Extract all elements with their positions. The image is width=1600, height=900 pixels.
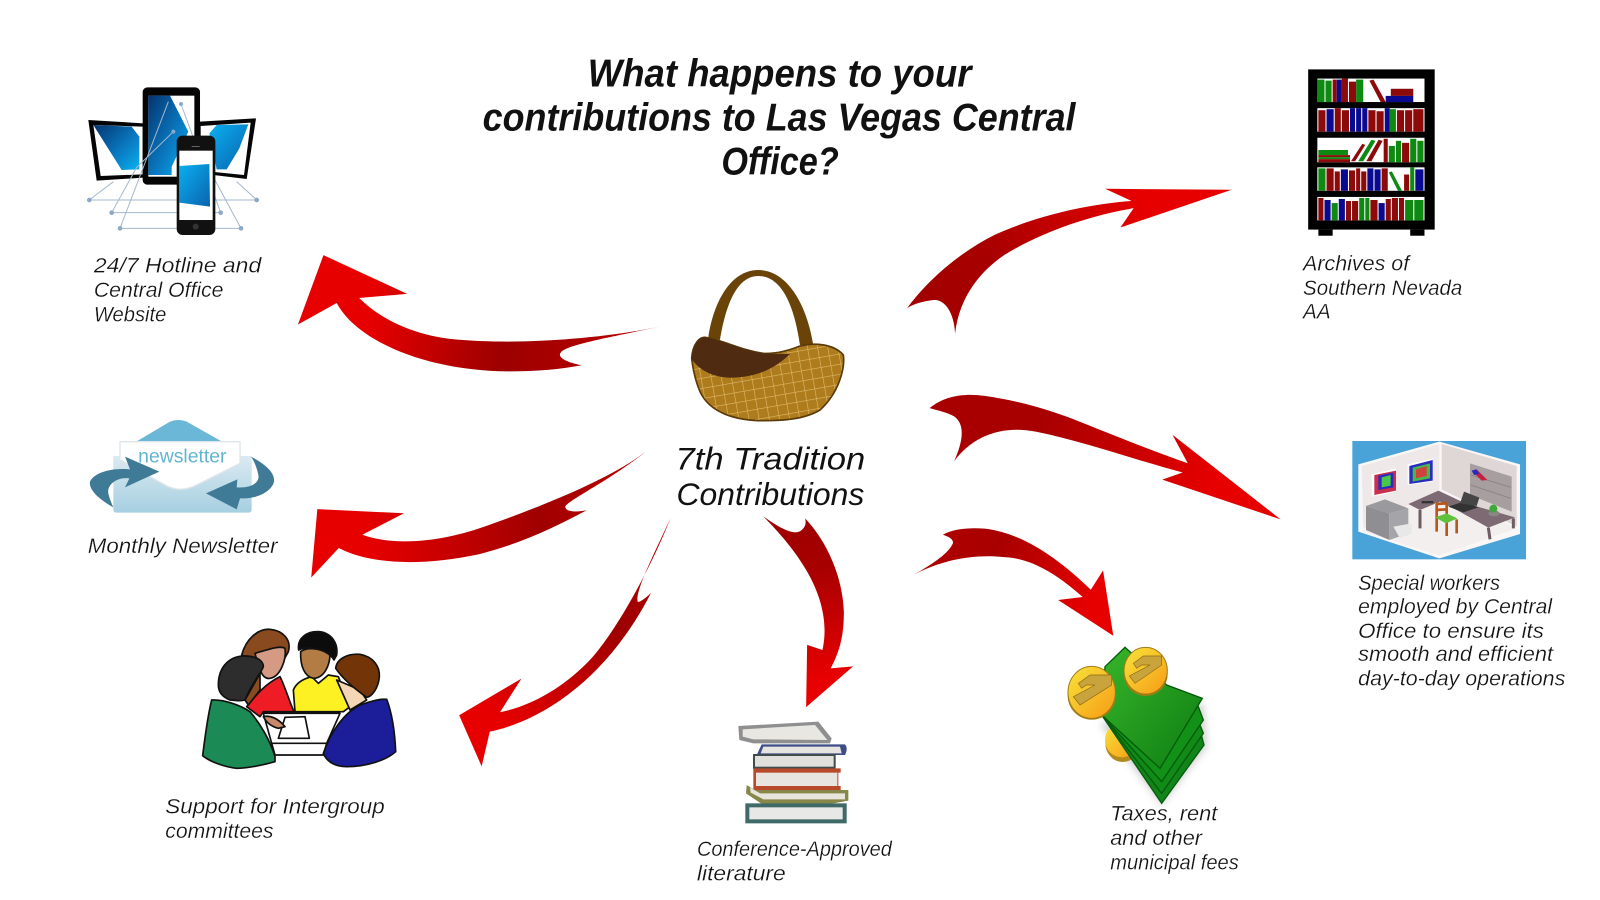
icon: stack of books — [738, 722, 848, 823]
circular arrow right — [206, 457, 274, 509]
icon: office room — [1352, 441, 1526, 559]
label: hotline: Website — [94, 302, 166, 326]
label: taxes: municipal fees — [1110, 850, 1239, 874]
title: contributions to Las Vegas Central — [483, 97, 1077, 140]
shelf 5 books — [1318, 198, 1423, 220]
arrow: to hotline — [298, 255, 660, 371]
man in yellow — [293, 632, 350, 712]
label: special workers: Office to ensure its — [1358, 619, 1544, 643]
hand — [263, 716, 285, 728]
label: literature: Conference-Approved — [697, 837, 893, 861]
plant — [1488, 505, 1500, 516]
label: taxes: Taxes, rent — [1110, 801, 1218, 825]
icon: newsletter envelope — [90, 420, 274, 513]
person in blue — [323, 654, 396, 767]
title — [483, 53, 1077, 183]
arrow: to special workers — [930, 395, 1281, 519]
shelf 2 books — [1318, 108, 1423, 132]
painting right — [1408, 458, 1433, 485]
icon: money and coins — [1068, 647, 1207, 805]
label: committees: committees — [165, 819, 274, 843]
front phone — [177, 136, 215, 235]
filing cabinet — [1366, 499, 1412, 540]
desk — [1408, 491, 1515, 539]
arrow: to newsletter — [311, 449, 649, 578]
table — [263, 713, 340, 755]
icon: bookshelf — [1308, 69, 1435, 236]
label: hotline: 24/7 Hotline and — [93, 253, 262, 277]
label: special workers: employed by Central — [1358, 594, 1553, 618]
label: literature: literature — [697, 862, 786, 886]
center phone — [143, 87, 200, 185]
label: taxes — [1110, 801, 1239, 874]
icon: group of people at table — [203, 629, 396, 768]
woman in red — [242, 629, 294, 717]
arrow: to literature — [763, 516, 853, 707]
label: special workers: Special workers — [1358, 571, 1500, 595]
label: archives — [1301, 251, 1462, 323]
label: archives: Archives of — [1301, 251, 1411, 275]
icon: newsletter envelope: newsletter — [138, 447, 227, 468]
network lines — [89, 102, 257, 228]
shelf 4 books — [1318, 167, 1423, 191]
left tablet — [88, 120, 143, 181]
paper — [278, 717, 309, 738]
shelf 3 books — [1318, 139, 1423, 162]
label: special workers: smooth and efficient — [1358, 642, 1554, 666]
painting left — [1372, 468, 1396, 497]
center label: 7th Tradition Contributions: 7th Tradition — [676, 440, 865, 476]
label: hotline — [93, 253, 262, 326]
title: What happens to your — [588, 53, 973, 96]
person in green — [203, 656, 275, 768]
icon: basket — [692, 270, 844, 421]
center label: 7th Tradition Contributions — [676, 440, 865, 512]
right tablet — [200, 118, 256, 179]
circular arrow left — [90, 457, 159, 507]
arrow: to committees — [459, 518, 670, 766]
label: taxes: and other — [1110, 826, 1203, 850]
label: committees: Support for Intergroup — [165, 794, 385, 818]
laptop — [1448, 492, 1479, 512]
title: Office? — [721, 140, 839, 183]
arrow: to taxes and fees — [914, 528, 1113, 636]
label: newsletter: Monthly Newsletter — [88, 534, 278, 558]
center label: 7th Tradition Contributions: Contributions — [677, 476, 864, 512]
label: committees — [165, 794, 385, 843]
label: archives: AA — [1301, 299, 1331, 323]
table edges — [272, 741, 327, 746]
label: special workers: day-to-day operations — [1358, 667, 1566, 691]
label: archives: Southern Nevada — [1303, 276, 1462, 300]
shelf 1 books — [1317, 79, 1413, 102]
icon: devices — [87, 87, 259, 235]
label: literature — [697, 837, 893, 886]
label: hotline: Central Office — [94, 278, 224, 302]
label: special workers — [1358, 571, 1566, 691]
chair — [1435, 503, 1457, 536]
arrow: to archives — [907, 189, 1232, 334]
